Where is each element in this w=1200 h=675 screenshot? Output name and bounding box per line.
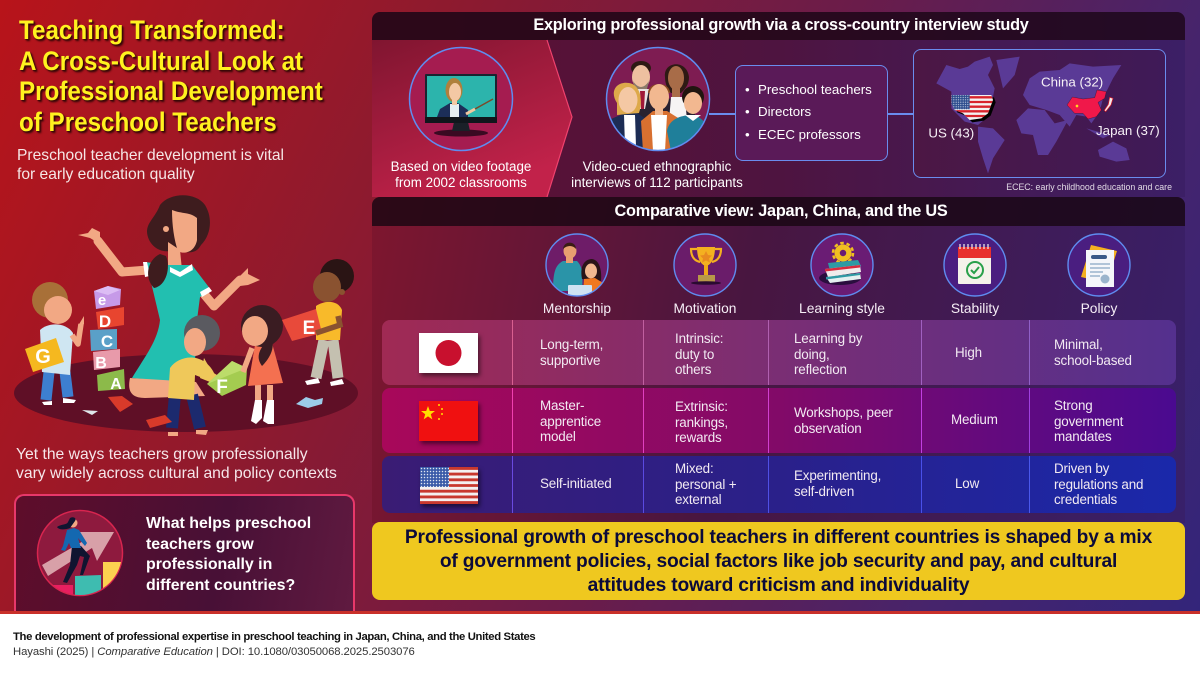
- row: China: apprentice: [540, 414, 601, 429]
- row: US: credentials: [1054, 492, 1117, 507]
- floor letters: [82, 396, 323, 428]
- intro text: [17, 147, 284, 183]
- question text: different countries?: [146, 576, 295, 594]
- panel: research question: [14, 494, 355, 611]
- row: Japan: [382, 320, 1176, 385]
- participant list: ECEC professors: [758, 127, 861, 142]
- icon: climbing steps: [36, 510, 124, 596]
- contrast text: vary widely across cultural and policy contexts: [16, 465, 337, 482]
- row: China: [382, 388, 1176, 453]
- right child: E: [303, 318, 315, 339]
- row: US: regulations and: [1054, 477, 1143, 492]
- centre man: [641, 111, 678, 150]
- label: policy: Policy: [1081, 301, 1117, 316]
- row: US: Driven by: [1054, 461, 1109, 476]
- right child: [282, 259, 354, 386]
- row: US: [382, 456, 1176, 513]
- row: China: government: [1054, 414, 1123, 429]
- row: China: Medium: [951, 412, 998, 427]
- row: US: personal +: [675, 477, 736, 492]
- question text: What helps preschool: [146, 515, 311, 532]
- caption: interviews: [571, 159, 743, 190]
- icon: policy document: [1067, 233, 1131, 297]
- label: mentorship: Mentorship: [543, 301, 611, 316]
- block stack: A: [110, 376, 122, 393]
- icon: stability calendar: [943, 233, 1007, 297]
- centre child: F: [216, 377, 228, 398]
- centre child: [168, 315, 247, 436]
- left woman: [612, 113, 644, 148]
- icon: motivation trophy: [673, 233, 737, 297]
- participant list: Preschool teachers: [758, 82, 872, 97]
- world map with country counts: China (32): [1041, 74, 1103, 89]
- row: Japan: others: [675, 362, 711, 377]
- heading: comparative view: Comparative view: Japan, China, and the US: [615, 202, 947, 220]
- caption: interviews: interviews of 112 participants: [571, 175, 743, 190]
- icon: mentorship: [545, 233, 609, 297]
- intro text: Preschool teacher development is vital: [17, 147, 284, 164]
- citation: [13, 631, 536, 658]
- heading: interview study: [372, 12, 1190, 40]
- participant list: •: [745, 82, 750, 97]
- column labels: [543, 301, 1118, 316]
- question text: professionally in: [146, 556, 272, 573]
- row: China: Extrinsic:: [675, 399, 728, 414]
- participant list: •: [745, 127, 750, 142]
- arrow: chevron for video footage: [372, 40, 573, 197]
- back woman: [665, 64, 689, 93]
- row: US: Mixed:: [675, 461, 714, 476]
- label: learning style: Learning style: [799, 301, 885, 316]
- caption: video footage: [391, 159, 531, 190]
- row: Japan: Intrinsic:: [675, 331, 723, 346]
- title: Teaching Transformed:: [19, 15, 285, 45]
- citation: Hayashi (2025) | Comparative Education | DOI: 10.1080/03050068.2025.2503076: [13, 646, 415, 658]
- flag: Japan: [418, 333, 482, 378]
- flag: US: [420, 467, 482, 510]
- contrast text: Yet the ways teachers grow professionally: [16, 446, 308, 463]
- title: [19, 15, 326, 136]
- block stack: e: [98, 292, 106, 309]
- row: China: model: [540, 429, 576, 444]
- teacher: [78, 195, 260, 398]
- Japan map: [1104, 97, 1113, 112]
- row: Japan: Minimal,: [1054, 337, 1103, 352]
- callout: conclusion: of government policies, social factors like job security and pay, and cultural: [440, 551, 1117, 572]
- callout: conclusion: Professional growth of preschool teachers in different countries is shaped by a mix: [405, 527, 1152, 548]
- question text: teachers grow: [146, 536, 254, 552]
- contrast text: [16, 446, 337, 482]
- row: US: Low: [955, 476, 979, 491]
- caption: interviews: Video-cued ethnographic: [583, 159, 731, 174]
- citation: The development of professional expertise in preschool teaching in Japan, China, and the United States: [13, 631, 535, 643]
- label: motivation: Motivation: [674, 301, 736, 316]
- footnote: ECEC: ECEC: early childhood education and care: [1006, 182, 1172, 192]
- row: China: Strong: [1054, 398, 1093, 413]
- heading: comparative view: [372, 197, 1190, 226]
- flag: China: [418, 401, 483, 447]
- China map: [1067, 90, 1106, 119]
- world map with country counts: Japan (37): [1096, 123, 1160, 138]
- row: Japan: High: [955, 345, 982, 360]
- row: US: external: [675, 492, 721, 507]
- block stack: C: [101, 332, 113, 351]
- caption: video footage: from 2002 classrooms: [395, 175, 527, 190]
- callout: conclusion: [372, 522, 1185, 600]
- title: Professional Development: [19, 76, 323, 106]
- row: Japan: school-based: [1054, 353, 1132, 368]
- icon: learning style books: [810, 233, 874, 297]
- row: US: Experimenting,: [794, 468, 881, 483]
- intro text: for early education quality: [17, 166, 195, 183]
- caption: video footage: Based on video footage: [391, 159, 531, 174]
- block stack: D: [99, 312, 111, 331]
- row: Japan: doing,: [794, 347, 830, 362]
- panel: participant types: [735, 65, 888, 161]
- row: China: observation: [794, 421, 862, 436]
- heading: interview study: Exploring professional growth via a cross-country interview study: [533, 16, 1029, 34]
- row: Japan: reflection: [794, 362, 847, 377]
- illustration: teacher and children with blocks: [14, 195, 358, 436]
- back man: [637, 93, 665, 118]
- row: China: rankings,: [675, 415, 728, 430]
- right man: [667, 116, 704, 148]
- icon: participant group: [606, 46, 710, 152]
- US map flag: [950, 93, 996, 122]
- world map with country counts: US (43): [928, 125, 974, 140]
- left child: [25, 282, 84, 405]
- callout: conclusion: attitudes toward criticism and individuality: [588, 575, 969, 596]
- icon: classroom video monitor: [408, 46, 514, 152]
- girl: [241, 305, 283, 424]
- participant list: [745, 82, 872, 142]
- panel: comparative view: [372, 197, 1185, 523]
- row: Japan: duty to: [675, 347, 714, 362]
- left child: G: [35, 346, 51, 368]
- connector: [709, 112, 736, 114]
- row: Japan: supportive: [540, 353, 600, 368]
- row: Japan: Long-term,: [540, 337, 603, 352]
- row: US: Self-initiated: [540, 476, 612, 491]
- connector: [887, 112, 914, 114]
- title: of Preschool Teachers: [19, 106, 277, 136]
- question text: [146, 515, 311, 594]
- block stack: B: [95, 355, 107, 372]
- row: China: Workshops, peer: [794, 405, 893, 420]
- row: Japan: Learning by: [794, 331, 862, 346]
- row: China: Master-: [540, 398, 584, 413]
- row: China: rewards: [675, 430, 722, 445]
- panel: interview study: [372, 12, 1185, 197]
- row: US: self-driven: [794, 484, 854, 499]
- label: stability: Stability: [951, 301, 999, 316]
- block stack: [90, 286, 125, 393]
- participant list: Directors: [758, 104, 811, 119]
- title: A Cross-Cultural Look at: [19, 46, 303, 76]
- world map with country counts: [928, 56, 1160, 173]
- row: China: mandates: [1054, 429, 1112, 444]
- participant list: •: [745, 104, 750, 119]
- panel: world map: [913, 49, 1166, 178]
